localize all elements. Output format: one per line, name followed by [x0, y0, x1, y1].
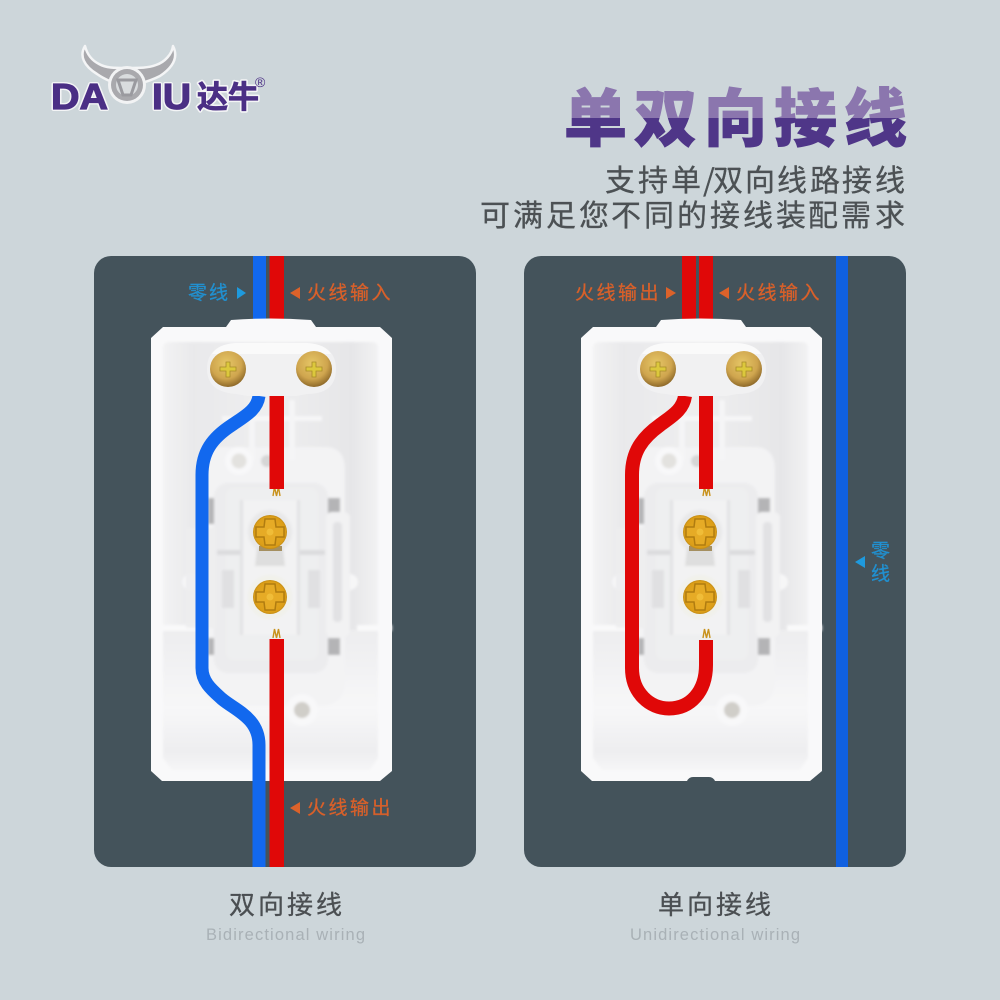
panel: bidirectional wiring [94, 256, 476, 867]
icon: bull horns [82, 46, 175, 83]
label: live output: 火线输出 [575, 278, 661, 305]
label: neutral vertical: 线 [871, 559, 890, 586]
logo letters IU: IU [152, 76, 191, 117]
label: neutral: 零线 [188, 278, 230, 305]
caption: unidirectional: 单向接线 [658, 885, 774, 922]
logo: DAIU 达牛 [51, 46, 266, 117]
live output wire [270, 639, 284, 867]
logo letters DA: DA [51, 76, 108, 117]
live input wire upper part [270, 256, 284, 346]
panel background [94, 256, 476, 867]
subtitle line 2: 可满足您不同的接线装配需求 [480, 191, 905, 235]
arrow: live output [290, 802, 300, 814]
arrow: neutral [855, 556, 865, 568]
label: live input: 火线输入 [307, 278, 393, 305]
label: live output: 火线输出 [307, 793, 393, 820]
live input wire upper part [699, 256, 713, 346]
switch box [151, 318, 392, 781]
arrow: live output [666, 287, 676, 299]
label: neutral vertical: 零 [871, 536, 890, 563]
neutral wire bypass [202, 396, 259, 867]
neutral wire [836, 256, 848, 867]
label: live input: 火线输入 [736, 278, 822, 305]
arrow: neutral [237, 287, 246, 299]
logo letters DA: DA [51, 76, 108, 117]
caption: bidirectional: 双向接线 [229, 885, 345, 922]
logo chinese name: 达牛 [197, 72, 259, 117]
caption: unidirectional english: Unidirectional wiring [630, 926, 801, 944]
logo letters IU: IU [152, 76, 191, 117]
wire clamp [207, 343, 336, 396]
panel background [524, 256, 906, 867]
live input wire lower part [699, 394, 713, 489]
panel: unidirectional wiring [524, 256, 906, 867]
logo chinese name: 达牛 [197, 72, 259, 117]
looped live wire [632, 396, 706, 708]
arrow: live input [719, 287, 729, 299]
arrow: live input [290, 287, 300, 299]
live input wire lower part [270, 394, 284, 489]
title: 单双向接线 [564, 69, 907, 160]
bottom notch of right switch box [687, 777, 715, 781]
wire clamp [637, 343, 766, 396]
switch box [581, 318, 822, 781]
registered mark: ® [255, 74, 266, 90]
neutral wire upper part [253, 256, 266, 346]
icon: bull head emblem [108, 66, 146, 104]
live output wire upper part [682, 256, 696, 346]
subtitle line 1: 支持单/双向线路接线 [605, 156, 905, 200]
caption: bidirectional english: Bidirectional wiring [206, 926, 366, 944]
